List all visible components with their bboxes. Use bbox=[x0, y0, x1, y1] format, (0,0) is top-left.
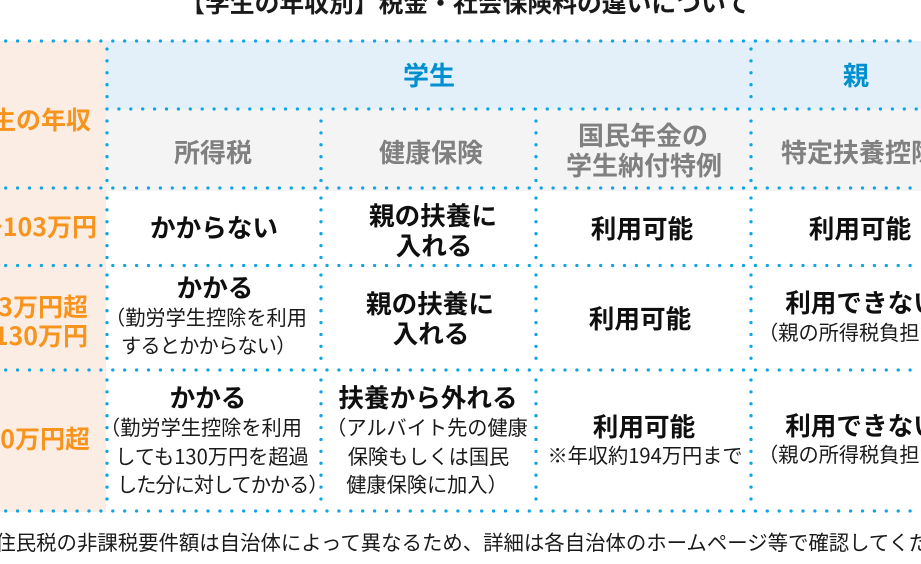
panel: subheader background bbox=[106, 109, 921, 191]
cell: removed from dependents: 扶養から外れる bbox=[338, 378, 518, 415]
cell: parent's dependent: 親の扶養に bbox=[366, 284, 494, 321]
cell: taxed with overage note: しても130万円を超過 bbox=[115, 441, 309, 470]
cell: parent's dependent bbox=[369, 196, 497, 263]
column heading: health insurance: 健康保険 bbox=[379, 133, 483, 170]
column heading: income tax: 所得税 bbox=[174, 133, 252, 170]
cell: available: 利用可能 bbox=[591, 209, 694, 246]
cell: taxed with overage note bbox=[100, 378, 327, 498]
heading: student: 学生 bbox=[403, 56, 455, 93]
cell: no tax: かからない bbox=[150, 208, 278, 245]
cell: taxed with overage note: した分に対してかかる） bbox=[117, 469, 327, 498]
cell: parent's dependent: 入れる bbox=[393, 314, 469, 351]
column heading: national pension student special payment: 国民年金の bbox=[578, 116, 708, 153]
cell: not available with note bbox=[758, 283, 921, 346]
cell: available up to annual income limit: ※年収約194万円まで bbox=[547, 440, 743, 469]
cell: parent's dependent: 親の扶養に bbox=[369, 196, 497, 233]
cell: available up to annual income limit: 利用可能 bbox=[593, 407, 696, 444]
cell: taxed with student deduction note bbox=[105, 268, 307, 359]
cell: available up to annual income limit bbox=[547, 407, 743, 469]
column heading: national pension student special payment bbox=[566, 116, 722, 183]
cell: parent's dependent bbox=[366, 284, 494, 351]
row label: over 1.03 million to 1.3 million yen bbox=[0, 288, 88, 353]
cell: removed from dependents: 健康保険に加入） bbox=[346, 469, 508, 498]
cell: removed from dependents: （アルバイト先の健康 bbox=[326, 412, 528, 441]
panel: income column background bbox=[0, 41, 106, 512]
cell: removed from dependents: 保険もしくは国民 bbox=[348, 441, 509, 470]
cell: taxed with student deduction note: かかる bbox=[177, 268, 253, 305]
cell: not available with note bbox=[758, 406, 921, 468]
column heading: national pension student special payment: 学生納付特例 bbox=[566, 146, 722, 183]
panel: header background bbox=[106, 41, 921, 109]
cell: available: 利用可能 bbox=[589, 299, 692, 336]
cell: taxed with overage note: かかる bbox=[170, 378, 246, 415]
cell: taxed with overage note: （勤労学生控除を利用 bbox=[100, 412, 302, 441]
cell: removed from dependents bbox=[326, 378, 528, 498]
cell: taxed with student deduction note: するとかからない） bbox=[121, 330, 296, 359]
cell: available parent: 利用可能 bbox=[809, 209, 912, 246]
heading: parent: 親 bbox=[843, 56, 869, 93]
cell: parent's dependent: 入れる bbox=[396, 226, 472, 263]
cell: taxed with student deduction note: （勤労学生控除を利用 bbox=[105, 302, 307, 331]
